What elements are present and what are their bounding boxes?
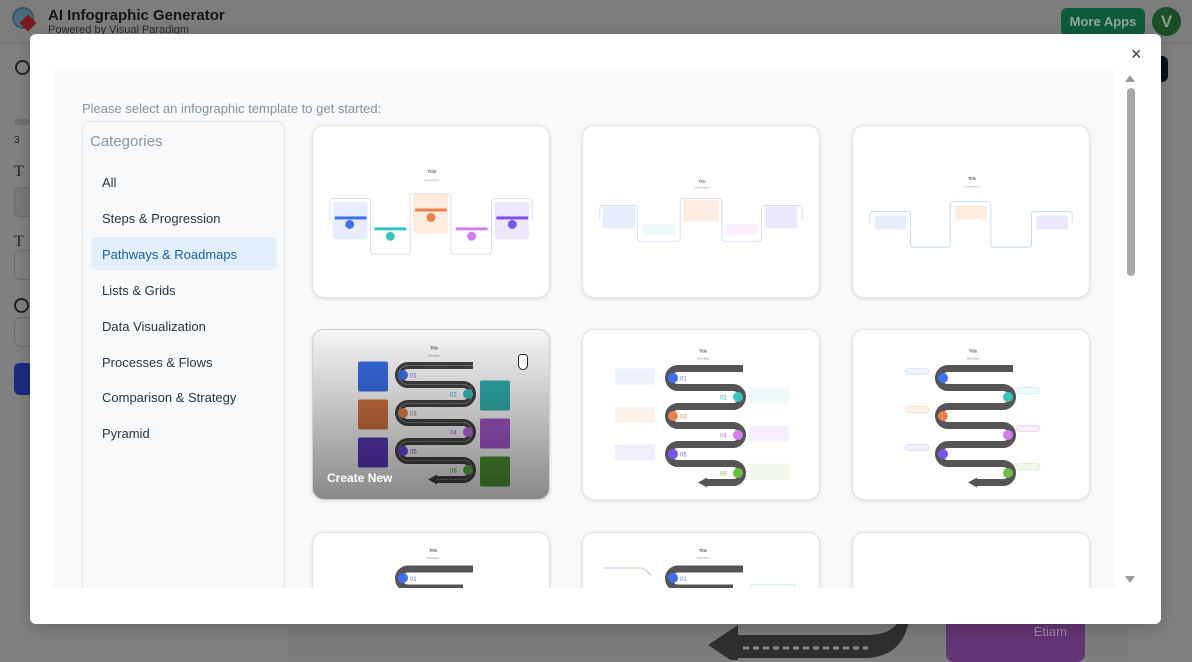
- template card 4 (hovered: Create New): Title: [430, 346, 439, 350]
- categories heading: Categories: [90, 133, 163, 150]
- background sidebar: 3: [14, 135, 20, 146]
- template card 4 (hovered: Create New): 04: [450, 430, 457, 436]
- category list: Lists & Grids: [102, 283, 176, 298]
- template card 8: 01: [680, 577, 687, 583]
- category list: Steps & Progression: [102, 211, 221, 226]
- category list: Comparison & Strategy: [102, 390, 236, 405]
- template card 5: 03: [680, 414, 687, 420]
- template card 8: Description: [697, 557, 710, 560]
- template card 8: Title: [699, 548, 708, 553]
- more apps button: More Apps: [1070, 14, 1136, 29]
- template card 5: 05: [680, 452, 687, 458]
- panel: categories: [82, 121, 285, 601]
- background sidebar: T: [14, 233, 24, 250]
- template card 3: Title: [968, 176, 977, 181]
- template card 5: Title: [699, 348, 708, 354]
- template card 6: Title: [969, 348, 978, 354]
- template card 5: 02: [720, 396, 727, 402]
- template card 8: [582, 532, 820, 632]
- template card 6: Description: [967, 358, 980, 360]
- close button: ×: [1131, 44, 1142, 64]
- logo: [12, 7, 34, 29]
- category list: [91, 175, 277, 441]
- template card 4 (hovered: Create New): 05: [410, 450, 417, 456]
- background app header: [0, 0, 1192, 44]
- template card 1: Description: [425, 178, 440, 182]
- template card 5: [582, 329, 820, 500]
- template card 5: 04: [720, 434, 727, 440]
- template card 4 (hovered: Create New): 03: [410, 412, 417, 418]
- instruction text: Please select an infographic template to get started:: [82, 101, 381, 116]
- app title: AI Infographic Generator: [48, 7, 225, 24]
- category list: Data Visualization: [102, 319, 206, 334]
- template card 1: [312, 125, 550, 298]
- template card 9: [852, 532, 1090, 632]
- category list: Processes & Flows: [102, 355, 213, 370]
- template card 2: Title: [698, 179, 706, 184]
- scrollbar: [1125, 75, 1135, 583]
- template card 1: Title: [427, 169, 437, 175]
- template card 7: Description: [427, 557, 440, 560]
- more apps button: [1061, 8, 1145, 36]
- template card 5: 01: [680, 376, 687, 382]
- template card 5: Description: [697, 358, 710, 360]
- background sidebar: [14, 60, 30, 395]
- cursor icon: [518, 354, 528, 370]
- template card 2: [582, 125, 820, 298]
- template card 4 (hovered: Create New): 06: [450, 468, 457, 474]
- hover overlay: [313, 330, 551, 501]
- template card 7: Title: [429, 548, 438, 553]
- category list: Pyramid: [102, 426, 150, 441]
- create new label: Create New: [327, 471, 392, 485]
- purple box: [946, 612, 1085, 662]
- road arrow: [708, 624, 908, 660]
- purple box: Etiam: [1034, 624, 1067, 639]
- template card 4 (hovered: Create New): [312, 329, 550, 500]
- background canvas bottom: [288, 560, 1128, 658]
- template card 7: 01: [410, 577, 417, 583]
- template card 5: 06: [720, 472, 727, 478]
- template card 3: Description: [965, 185, 980, 189]
- template card 6: [852, 329, 1090, 500]
- background sidebar: T: [14, 163, 24, 180]
- category list: Pathways & Roadmaps: [102, 247, 237, 262]
- template card 2: Description: [695, 186, 710, 190]
- inner panel: [53, 70, 1115, 588]
- avatar: V: [1161, 12, 1172, 31]
- template card 7: [312, 532, 550, 632]
- avatar: [1152, 7, 1181, 36]
- template card 4 (hovered: Create New): 01: [410, 374, 417, 380]
- template card 3: [852, 125, 1090, 298]
- template card 4 (hovered: Create New): 02: [450, 392, 457, 398]
- template card 4 (hovered: Create New): Description: [428, 354, 441, 358]
- background app header: Powered by Visual Paradigm: [48, 24, 189, 36]
- category list: All: [102, 175, 116, 190]
